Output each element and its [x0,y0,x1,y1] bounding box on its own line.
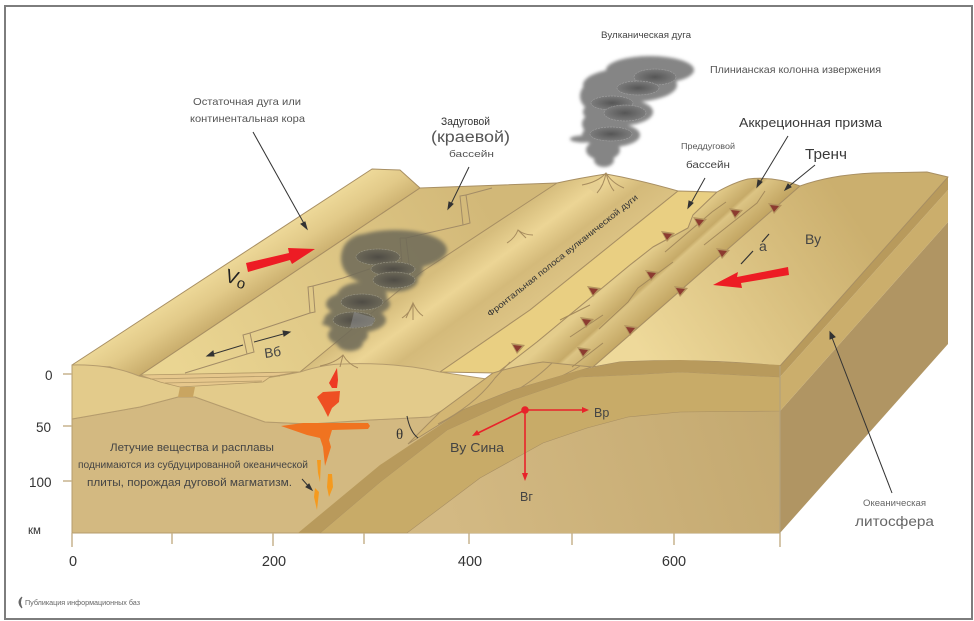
basin sediment lens [140,372,297,387]
callout: volatiles and melts: поднимаются из субдуцированной океанической [78,460,308,471]
strip: back-arc basin [139,183,557,376]
label: a: а [759,238,767,254]
strip: remnant arc [72,169,420,376]
side face: oceanic lithosphere [780,177,948,533]
volcano: rear cone [507,230,533,243]
label: plinian column: Плинианская колонна извержения [710,64,881,76]
label: Vo [222,266,249,293]
callout: volatiles and melts: плиты, порождая дуговой магматизм. [87,477,292,489]
volcano: summit cone [582,173,624,194]
strip: accretionary wedge [497,178,800,373]
block diagram [72,169,948,533]
label: Vg: Вг [520,490,533,504]
depth axis labels [28,368,53,537]
back-arc spreading ridge segments [185,188,492,373]
thrust faults in accretionary wedge [560,191,765,367]
label: fore-arc basin: бассейн [686,159,730,171]
front face: right mantle [407,411,780,533]
label: trench: Тренч [805,147,847,163]
pointer arrows [207,132,892,493]
callout: volatiles and melts: Летучие вещества и расплавы [110,442,274,454]
label: back-arc basin: (краевой) [431,129,510,146]
label: volcanic arc: Вулканическая дуга [601,30,691,40]
front face: upper plate crust [72,364,500,424]
callout: volatiles and melts [78,442,308,489]
subducting slab: light layer [320,372,780,533]
label: accretionary prism: Аккреционная призма [739,116,882,130]
back-arc ash cloud shadow [322,230,447,351]
velocity vectors [472,406,589,481]
label: fore-arc basin: Преддуговой [681,141,735,151]
label: fore-arc basin [681,141,735,171]
distance axis labels: 200 [262,554,286,570]
footer credit: Публикация информационных баз [25,598,141,607]
volcano: front cone [320,355,358,368]
label: Vb: Вб [263,344,282,361]
distance axis labels [69,554,686,570]
label: Vo: V [222,266,241,290]
subducting slab: dark layer [298,360,780,533]
angle arc [407,416,418,438]
plate motion arrow: Vo [246,248,315,272]
depth axis labels: 100 [29,475,52,490]
crustal pillar [178,387,195,397]
distance axis labels: 600 [662,554,686,570]
depth axis labels: 50 [36,420,51,435]
depth axis labels: км [28,525,41,537]
label: remnant arc: Остаточная дуга или [193,97,301,108]
top surface strips [72,169,948,376]
label: oceanic lithosphere [855,498,934,529]
magma: rising melts [281,368,370,510]
label: Vo: o [235,275,248,293]
label: remnant arc: континентальная кора [190,114,305,125]
label: Vy convergence: Ву Сина [450,440,505,455]
label: frontal arc belt: Фронтальная полоса вулканической дуги [485,192,640,319]
label: back-arc basin: бассейн [449,149,494,160]
label: back-arc basin [431,116,510,160]
distance axis labels: 400 [458,554,482,570]
volcanoes [320,173,624,368]
front face: mantle [72,377,780,533]
label: theta: θ [396,427,403,443]
plinian eruption column [570,56,694,167]
label: oceanic lithosphere: Океаническая [863,498,926,508]
label: back-arc basin: Задуговой [441,116,490,128]
label: Vy on plate: Ву [805,231,821,247]
plate motion arrow: Vy [713,267,789,288]
distance axis labels: 0 [69,554,77,570]
strip: fore-arc basin [440,191,717,373]
depth axis labels: 0 [45,368,53,383]
label: remnant arc [190,97,305,125]
strip: frontal arc [300,174,678,372]
label: Vr: Вр [594,406,609,420]
accretionary wedge front [408,362,592,444]
label: oceanic lithosphere: литосфера [855,513,934,529]
thrust triangle markers [511,203,782,358]
volcano: mid cone [402,303,423,320]
axis ticks [63,374,780,547]
strip: oceanic plate [593,172,948,367]
